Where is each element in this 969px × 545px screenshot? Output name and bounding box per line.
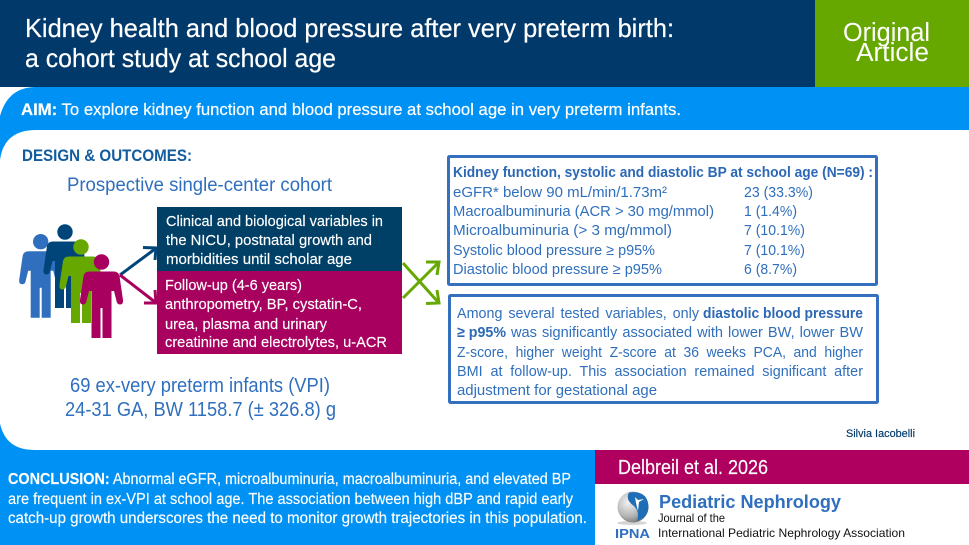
- panel: association findings: [450, 296, 878, 402]
- cohort summary: 24-31 GA, BW 1158.7 (± 326.8) g: [65, 399, 336, 421]
- panel: design and outcomes: [0, 130, 969, 450]
- title: Kidney health and blood pressure after very preterm birth:: [25, 13, 674, 43]
- panel: kidney function results: [448, 156, 876, 284]
- box: clinical variables: [157, 207, 402, 271]
- results heading: Kidney function, systolic and diastolic BP at school age (N=69) :: [453, 164, 873, 181]
- panel: association findings: Among several tested variables, only: [457, 305, 699, 322]
- box: follow-up: [157, 271, 402, 354]
- cohort summary: [65, 375, 336, 421]
- arrow: to clinical variables: [120, 248, 156, 275]
- results table: Microalbuminuria (> 3 mg/mmol): [453, 222, 672, 239]
- citation bar: [595, 450, 969, 484]
- arrow: to follow-up: [120, 275, 156, 303]
- results table: 1 (1.4%): [744, 203, 797, 220]
- panel: association findings: BMI at follow-up. This association remained significant after: [457, 363, 863, 380]
- icon: group of people: [19, 224, 123, 338]
- box: follow-up: Follow-up (4-6 years): [165, 277, 302, 294]
- results table: 6 (8.7%): [744, 261, 797, 278]
- results table: Systolic blood pressure ≥ p95%: [453, 242, 655, 259]
- icon: IPNA logo: [615, 492, 650, 541]
- box: clinical variables: morbidities until scholar age: [166, 251, 352, 268]
- panel: association findings: Z-score, higher weight Z-score at 36 weeks PCA, and higher: [457, 344, 863, 361]
- badge: original article: Original: [843, 19, 930, 47]
- results table: 7 (10.1%): [744, 242, 805, 259]
- panel: association findings: diastolic blood pressure: [703, 305, 863, 322]
- panel: association findings: ≥ p95%: [457, 324, 506, 341]
- citation bar: Delbreil et al. 2026: [618, 456, 768, 479]
- results table: 23 (33.3%): [744, 184, 813, 201]
- box: follow-up: anthropometry, BP, cystatin-C,: [165, 296, 362, 313]
- results table: 7 (10.1%): [744, 222, 805, 239]
- results table: eGFR* below 90 mL/min/1.73m²: [453, 184, 667, 201]
- badge: original article: [815, 0, 969, 87]
- box: clinical variables: the NICU, postnatal growth and: [166, 232, 372, 249]
- heading: design and outcomes: DESIGN & OUTCOMES:: [22, 147, 192, 165]
- arrows: green cross: [403, 262, 439, 304]
- conclusion panel: CONCLUSION: Abnormal eGFR, microalbuminuria, macroalbuminuria, and elevated BP: [8, 471, 571, 488]
- box: follow-up: creatinine and electrolytes, u-ACR: [165, 334, 387, 351]
- author credit: Silvia Iacobelli: [846, 428, 915, 440]
- icon: IPNA logo: IPNA: [615, 527, 650, 541]
- header panel: [0, 0, 815, 87]
- title: [25, 13, 674, 73]
- study type: Prospective single-center cohort: [67, 174, 333, 196]
- cohort summary: 69 ex-very preterm infants (VPI): [70, 375, 330, 397]
- title: a cohort study at school age: [25, 43, 336, 73]
- journal name: Pediatric Nephrology: [659, 491, 842, 512]
- results table: Macroalbuminuria (ACR > 30 mg/mmol): [453, 203, 714, 220]
- aim band: AIM: To explore kidney function and blood pressure at school age in very preterm infants.: [21, 100, 681, 119]
- journal block: [595, 484, 969, 545]
- panel: association findings: was significantly associated with lower BW, lower BW: [510, 324, 864, 341]
- journal subtitle: International Pediatric Nephrology Association: [658, 526, 905, 540]
- results table: Diastolic blood pressure ≥ p95%: [453, 261, 662, 278]
- results table: [453, 184, 813, 278]
- panel: association findings: adjustment for gestational age: [457, 382, 657, 399]
- conclusion panel: are frequent in ex-VPI at school age. The association between high dBP and rapid early: [8, 491, 573, 508]
- conclusion panel: catch-up growth underscores the need to monitor growth trajectories in this population.: [8, 510, 587, 527]
- box: clinical variables: Clinical and biological variables in: [166, 213, 383, 230]
- badge: original article: Article: [856, 39, 929, 67]
- journal subtitle: [658, 511, 905, 540]
- journal subtitle: Journal of the: [658, 511, 725, 525]
- box: follow-up: urea, plasma and urinary: [165, 316, 327, 333]
- conclusion panel: [0, 424, 595, 545]
